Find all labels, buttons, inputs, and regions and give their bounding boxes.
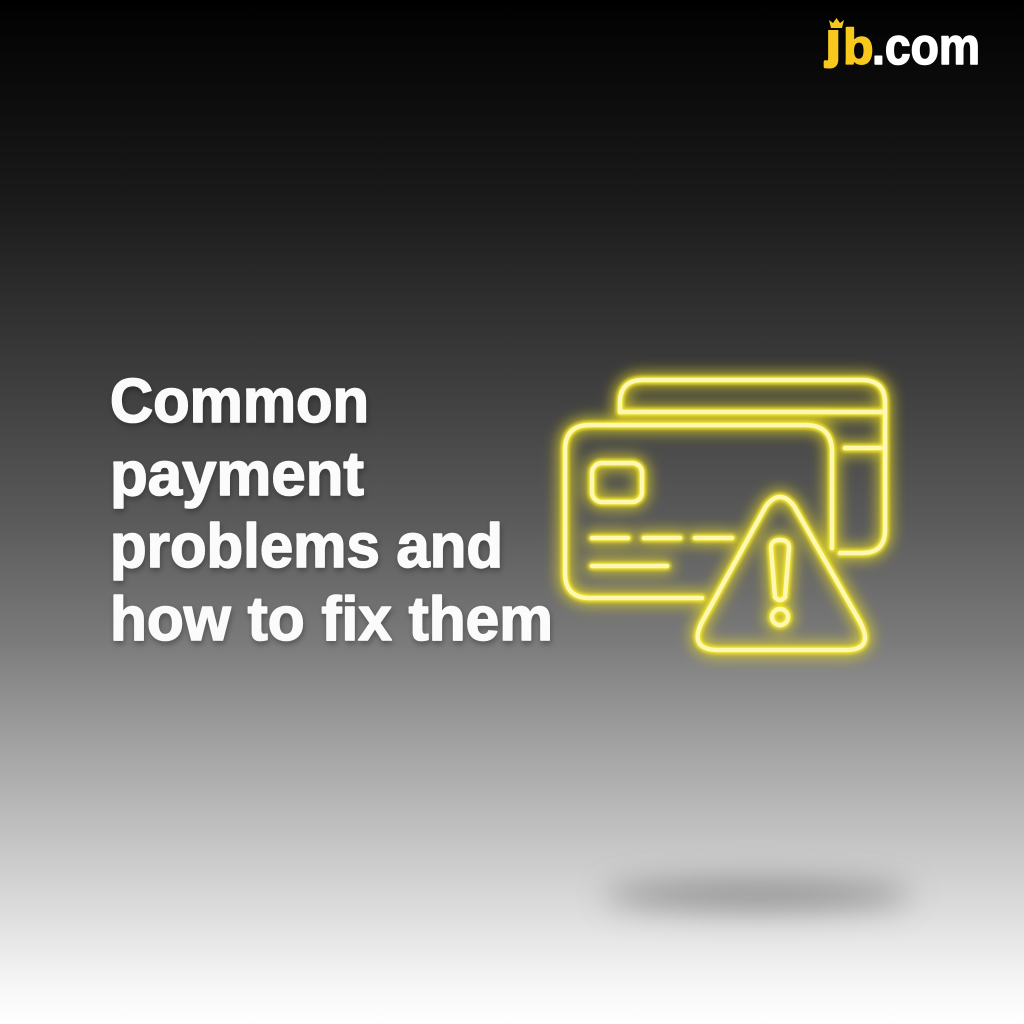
- artwork canvas: [112, 18, 978, 929]
- title: [110, 367, 553, 654]
- logo crown: [829, 18, 844, 28]
- title: problems and: [110, 512, 503, 581]
- icon: neon credit cards with warning triangle: [565, 380, 885, 650]
- logo: jb.com: [824, 18, 978, 68]
- floating drop shadow: [603, 881, 913, 909]
- logo .com: .com: [872, 18, 980, 76]
- title: payment: [110, 440, 364, 509]
- logo letter j: j: [825, 10, 840, 68]
- title: how to fix them: [110, 585, 553, 654]
- logo letter b: b: [843, 19, 874, 75]
- title: Common: [110, 367, 369, 436]
